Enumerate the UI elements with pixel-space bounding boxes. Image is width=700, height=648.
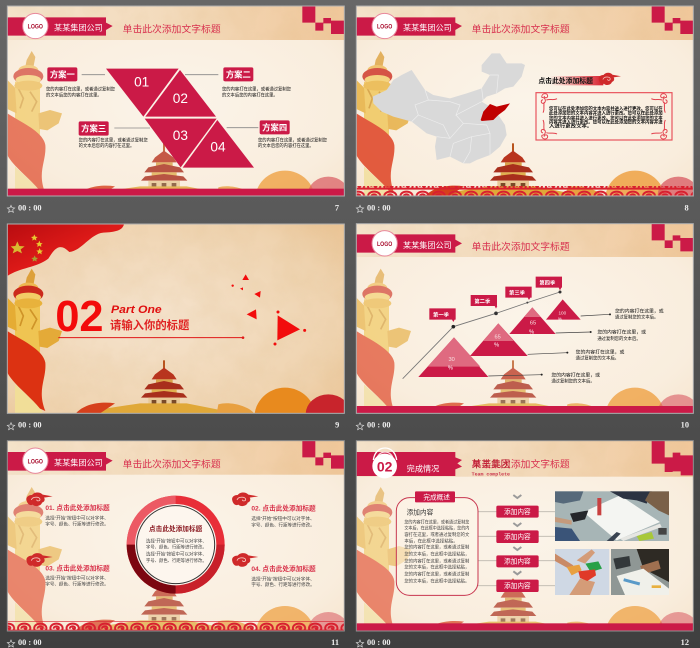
pyramid 65% b: %	[529, 329, 534, 335]
corner squares	[652, 224, 693, 251]
plan 4 label: 您的内容打在这里，或者通过复制您	[258, 136, 327, 143]
pyramid 65% a: 65	[495, 334, 501, 340]
cloud pattern footer	[356, 186, 693, 196]
point 02: 02. 点击此处添加标题	[251, 504, 316, 513]
flag: step 1	[429, 308, 456, 322]
slide title: 单击此次添加文字标题	[472, 241, 570, 253]
highlighted province	[481, 103, 510, 121]
triangle 04	[183, 120, 254, 168]
slide 12 background	[356, 441, 699, 648]
point 04: 04. 点击此处添加标题	[251, 564, 316, 573]
plan 2 label: 方案二	[226, 70, 251, 80]
slide title: 单击此次添加文字标题	[472, 24, 570, 36]
pyramid 30%: %	[448, 365, 453, 371]
point 03	[26, 553, 110, 587]
plan 1 label: 方案一	[50, 70, 75, 80]
point 02: 选择“开始”按钮中可以对字体、	[251, 515, 315, 522]
overview box: 您的内容打在这里，或者通过复制您	[404, 518, 470, 525]
overview box: 完成概述	[423, 493, 450, 502]
pyramid 100%: 100	[558, 311, 567, 316]
overview box: 您的文本后，在此框中选择粘贴。	[404, 577, 469, 584]
ornate text frame: 内容并进入进行更改。您可以在此处添加您的文本内容并进	[549, 118, 663, 125]
corner squares	[652, 6, 693, 34]
point 01: 字号、颜色、行距等进行修改。	[45, 520, 109, 527]
photo: team meeting	[555, 491, 669, 541]
slide 8: map	[356, 6, 699, 229]
overview box: 您的内容打在这里，或者通过复制	[404, 570, 470, 577]
slide 10 footer: 10	[681, 421, 689, 430]
ornate text frame: 您可以在此处添加您的文本内容并进入进行更改。您可以在	[549, 105, 663, 112]
overview box: 您的文本后，在此框中选择粘贴，	[404, 564, 469, 571]
slide title: 单击此次添加文字标题	[123, 24, 221, 36]
overview box	[396, 491, 478, 595]
point 04: 字号、颜色、行距等进行修改。	[251, 581, 315, 588]
ornate text frame: 您的文本内容并进入进行更改。您可以在此处添加您的文本	[549, 114, 663, 121]
header ribbon: company: LOGO	[377, 241, 392, 248]
overview box: 容打在这里，或者通过复制您的文	[404, 531, 470, 538]
pyramid 100%: %	[558, 317, 562, 322]
slide 11 frame	[7, 441, 344, 631]
slide 8 frame	[356, 6, 693, 196]
overview box: 您的内容打在这里，或者通过复制	[404, 557, 470, 564]
slide 11 content	[7, 441, 349, 648]
callout 3: 您的内容打在这里，或	[597, 329, 646, 336]
triangle 02: 02	[173, 91, 188, 106]
plan 3 label: 方案三	[81, 124, 106, 134]
photo: hands on charts	[611, 549, 669, 595]
plan 2 label: 的文本后您的内容打在这里。	[222, 91, 278, 98]
slide 12 content	[356, 441, 699, 648]
point 03: 03. 点击此处添加标题	[45, 563, 110, 572]
donut centre text	[146, 524, 207, 564]
slide 8 footer	[356, 203, 689, 212]
callout 4: 通过复制您的文本后。	[615, 314, 658, 321]
slide 9 content	[8, 224, 344, 413]
slide 8 footer: 8	[684, 203, 689, 212]
slide 10: pyramid steps	[356, 224, 699, 448]
overview box: 您的文本后，在此框中选择粘贴，	[404, 551, 469, 558]
header ribbon: company	[356, 231, 462, 256]
slide 10 frame	[356, 224, 693, 413]
slide 10 footer	[356, 421, 689, 430]
slide 7 frame	[7, 6, 344, 196]
plan 3 label: 的文本后您的内容打在这里。	[79, 142, 134, 149]
connector lines	[478, 512, 555, 586]
corner squares	[652, 441, 693, 475]
slide 7 background	[8, 6, 344, 189]
ornate text frame	[536, 93, 672, 140]
slide title: 单击此次添加文字标题	[472, 459, 570, 471]
scattered triangles	[232, 274, 306, 346]
part one label: Part One	[111, 304, 162, 316]
footer band	[356, 623, 693, 631]
slide 7: four plans	[8, 6, 344, 196]
flag: step 3: 第三季	[509, 288, 526, 296]
slide title: 单击此次添加文字标题	[123, 459, 221, 471]
point 03: 字号、颜色、行距等进行修改。	[45, 580, 109, 587]
slide 9 footer	[7, 421, 339, 430]
slide 8 content	[356, 6, 693, 196]
overview box: 添加内容	[407, 508, 434, 517]
map of China	[373, 53, 525, 163]
slide 11 footer: 11	[331, 638, 339, 647]
flag: step 1: 第一季	[433, 310, 450, 318]
triangle 02	[145, 70, 216, 117]
flag: step 2	[471, 295, 497, 309]
donut centre text: 选择“开始”按钮中可以对字体、	[146, 551, 207, 558]
slide title	[472, 459, 570, 477]
pyramid 30%: 30	[449, 357, 455, 363]
underline with dot	[58, 336, 244, 339]
slide 11 background	[7, 441, 349, 648]
pyramid 30%	[418, 337, 488, 377]
slide 11: circle with four points	[7, 441, 349, 648]
donut centre text: 字号、颜色、行距等进行修改。	[146, 557, 207, 564]
ornate text frame: 入进行更改文本。	[549, 122, 592, 129]
triangle 01	[106, 69, 179, 117]
plan 2 label: 您的内容打在这里，或者通过复制您	[222, 86, 291, 93]
step button 1: 添加内容	[504, 507, 531, 516]
heading with cloud	[538, 73, 621, 85]
slide 9 frame	[7, 224, 344, 413]
footer band	[7, 189, 344, 196]
point 03: 选择“开始”按钮中可以对字体、	[45, 575, 109, 582]
slide 11 footer	[7, 638, 339, 647]
overview box: 您的内容打在这里，或者通过复制	[404, 544, 470, 551]
callout 4: 您的内容打在这里，或	[615, 308, 664, 315]
plan 3 label: 您的内容打在这里，或者通过复制您	[79, 136, 148, 143]
slide 9 footer: 9	[335, 421, 339, 430]
triangle 03: 03	[173, 128, 188, 143]
plan 4 label	[227, 120, 327, 149]
point 02: 字号、颜色、行距等进行修改。	[251, 521, 315, 528]
pyramid 65% b: 65	[530, 321, 536, 327]
corner squares	[302, 441, 344, 469]
corner squares	[302, 6, 344, 34]
step button 3: 添加内容	[504, 557, 531, 566]
callout 1	[488, 372, 600, 385]
point 01: 01. 点击此处添加标题	[45, 503, 110, 512]
header ribbon: company: LOGO	[377, 24, 392, 31]
slide 12 footer: 00 : 00	[367, 638, 391, 647]
plan 1 label: 您的内容打在这里，或者通过复制您	[46, 86, 115, 93]
header ribbon: company	[7, 448, 113, 473]
slide 11 footer: 00 : 00	[18, 638, 42, 647]
plan 4 label: 的文本后您的内容打在这里。	[258, 142, 314, 149]
photo: puzzle hands	[555, 549, 609, 595]
flag: step 4	[536, 277, 562, 290]
section number: 02	[55, 293, 104, 341]
header ribbon: section badge	[356, 448, 462, 478]
donut centre text: 字号、颜色、行距等进行修改。	[146, 544, 207, 551]
donut chart	[127, 496, 225, 594]
slide 8 background	[356, 6, 693, 196]
header ribbon: company	[356, 13, 462, 39]
slide 9: section divider	[7, 224, 351, 448]
header ribbon: company: 某某集团公司	[403, 23, 452, 33]
slide 12 footer	[356, 638, 689, 647]
header ribbon: company: 某某集团公司	[54, 457, 103, 467]
step button 2: 添加内容	[504, 532, 531, 541]
section title: 请输入你的标题	[110, 318, 190, 332]
pyramid 65% a	[470, 323, 528, 356]
callout 2: 您的内容打在这里，或	[576, 348, 624, 355]
step button 4	[496, 580, 539, 592]
donut centre text: 点击此处添加标题	[149, 524, 203, 533]
step button 4: 添加内容	[504, 581, 531, 590]
callout 2: 通过复制您的文本后。	[576, 354, 619, 361]
step button 3	[496, 555, 539, 567]
flag: step 2: 第二季	[474, 297, 491, 305]
slide 7 footer: 00 : 00	[18, 203, 42, 212]
slide 9 footer: 00 : 00	[18, 421, 42, 430]
callout 4	[581, 308, 664, 321]
header ribbon: company: 某某集团公司	[54, 23, 103, 33]
trend line	[403, 290, 562, 379]
donut centre text: 选择“开始”按钮中可以对字体、	[146, 537, 207, 544]
slide 12 frame	[356, 441, 693, 631]
slide 12: completion overview	[356, 441, 699, 648]
cloud pattern footer	[7, 621, 344, 631]
pyramid 65% b	[509, 307, 556, 335]
plan 1 label	[46, 67, 115, 98]
step button 1	[496, 506, 539, 518]
pyramid 65% a: %	[494, 343, 499, 349]
header ribbon: section badge: 02	[377, 458, 393, 474]
flag	[7, 224, 124, 276]
overview box: 本后，在此框中选择粘贴。	[404, 537, 458, 544]
triangle 04: 04	[210, 140, 226, 155]
callout 2	[528, 348, 624, 361]
triangle 01: 01	[134, 75, 149, 90]
chevrons	[513, 495, 521, 574]
plan 1 label: 的文本后您的内容打在这里。	[46, 91, 102, 98]
slide 8 footer: 00 : 00	[367, 203, 391, 212]
header ribbon: section badge: 完成情况	[407, 463, 439, 473]
header ribbon: company: 某某集团公司	[403, 240, 452, 250]
header ribbon: company: LOGO	[28, 458, 43, 465]
plan 2 label	[185, 67, 291, 98]
slide 10 background	[356, 224, 693, 406]
ornate text frame: 此处添加您的文本内容并进入进行更改。您可以在此处添加	[549, 110, 663, 117]
point 04: 选择“开始”按钮中可以对字体、	[251, 575, 315, 582]
point 01: 选择“开始”按钮中可以对字体、	[45, 515, 109, 522]
callout 3	[556, 329, 646, 342]
heading with cloud: 点击此处添加标题	[538, 76, 593, 85]
slide 10 content	[356, 224, 693, 413]
plan 4 label: 方案四	[262, 122, 287, 132]
slide title: 某某集团	[472, 459, 510, 471]
header ribbon: company	[7, 13, 113, 39]
slide title: Team complete	[472, 471, 510, 477]
slide 9 background	[8, 224, 344, 413]
step button 2	[496, 530, 539, 543]
slide 7 footer	[7, 203, 339, 212]
point 01	[26, 492, 110, 527]
plan 3 label	[79, 121, 150, 149]
slide 12 footer: 12	[681, 638, 689, 647]
point 04	[232, 553, 316, 588]
header ribbon: company: LOGO	[28, 24, 43, 31]
flag: step 3	[505, 287, 532, 300]
flag: step 4: 第四季	[539, 279, 556, 287]
slide 10 footer: 00 : 00	[367, 421, 391, 430]
callout 1: 通过复制您的文本后。	[551, 378, 595, 385]
callout 1: 您的内容打在这里，或	[551, 372, 600, 379]
callout 3: 通过复制您的文本后。	[597, 335, 641, 342]
footer band	[356, 406, 693, 413]
triangle 03	[145, 119, 217, 167]
pyramid 100%	[546, 299, 581, 322]
slide 7 footer: 7	[335, 203, 339, 212]
point 02	[232, 492, 316, 528]
overview box: 文本后，在此框中选择粘贴，您的内	[404, 525, 470, 532]
